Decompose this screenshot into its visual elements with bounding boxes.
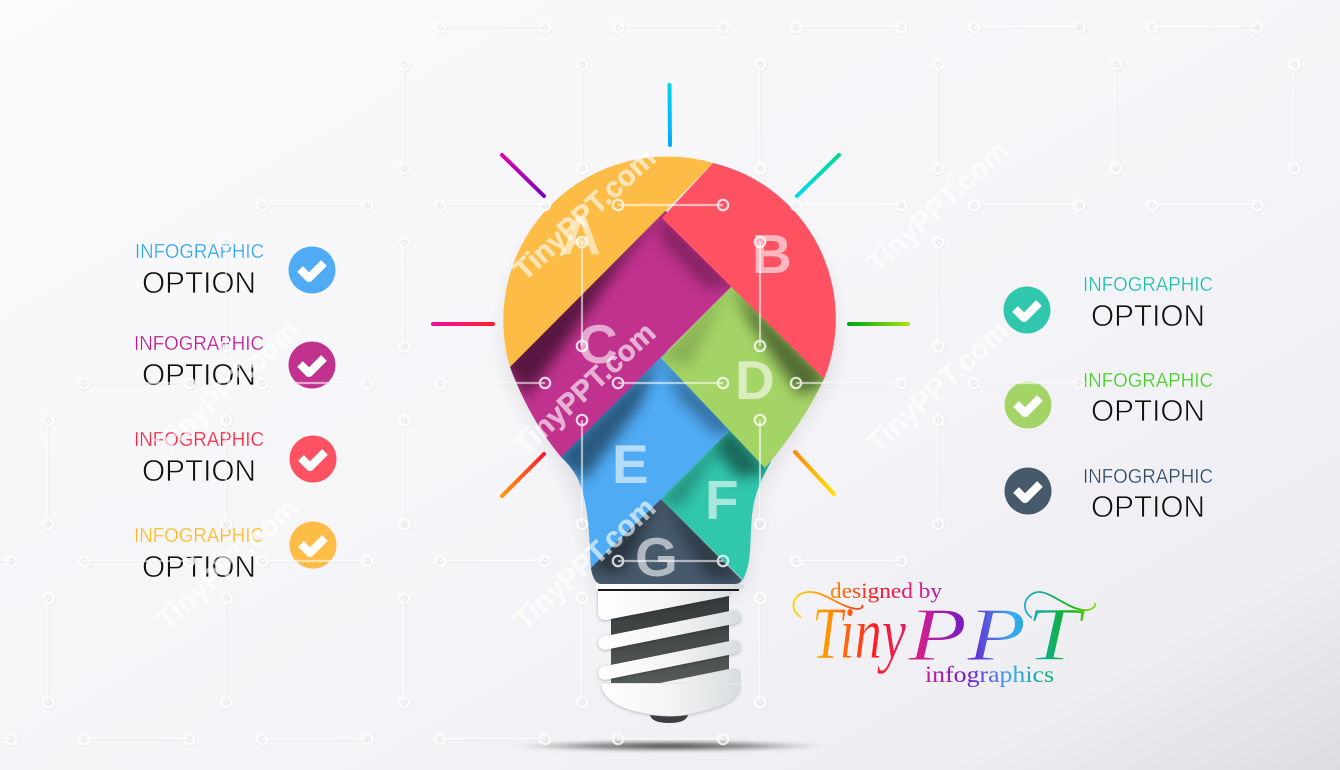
threads xyxy=(605,617,734,673)
logo: designed by TinyPPT infographics: infographics xyxy=(925,662,1054,687)
panel B: red xyxy=(662,163,836,379)
option: teal xyxy=(1004,273,1213,334)
dark screw core xyxy=(611,595,729,683)
panel letters: C xyxy=(578,313,618,375)
panel G: dark slate xyxy=(591,499,742,584)
option: orange: OPTION xyxy=(142,550,256,584)
right options xyxy=(1004,273,1213,524)
watermarks: TinyPPT.com xyxy=(151,492,305,637)
option: slate: INFOGRAPHIC xyxy=(1083,465,1213,488)
panel F: teal xyxy=(661,428,771,580)
left options xyxy=(134,240,336,584)
option: blue: INFOGRAPHIC xyxy=(135,240,264,263)
option: orange: INFOGRAPHIC xyxy=(134,524,264,547)
panel letters: G xyxy=(635,526,678,588)
option: green: OPTION xyxy=(1091,394,1205,428)
panel letters: A xyxy=(561,204,601,266)
panel letters: D xyxy=(735,349,775,411)
panel E: blue xyxy=(561,345,745,570)
panel letters: B xyxy=(752,223,792,285)
panel A: orange xyxy=(503,156,713,367)
option: slate xyxy=(1004,465,1213,524)
option: red xyxy=(134,428,336,488)
panel D: green xyxy=(661,282,826,468)
option: green: INFOGRAPHIC xyxy=(1083,369,1213,392)
watermarks: TinyPPT.com xyxy=(861,315,1015,460)
logo: designed by TinyPPT infographics: Tiny xyxy=(812,593,906,675)
contact tip xyxy=(650,715,688,723)
base cap xyxy=(660,668,741,683)
collar xyxy=(596,584,744,589)
panel C: magenta xyxy=(510,205,735,457)
bulb soft shadow xyxy=(503,169,837,594)
logo: designed by TinyPPT infographics xyxy=(793,578,1095,687)
option: blue xyxy=(135,240,336,300)
ground shadow xyxy=(509,740,829,752)
panel letters xyxy=(561,204,792,588)
option: red: INFOGRAPHIC xyxy=(134,428,264,451)
watermarks xyxy=(151,135,1015,637)
panel letters: E xyxy=(612,433,649,495)
option: green xyxy=(1004,369,1213,428)
option: magenta: INFOGRAPHIC xyxy=(134,332,264,355)
watermarks: TinyPPT.com xyxy=(151,315,305,460)
screw base xyxy=(596,584,744,723)
logo: designed by TinyPPT infographics: PPT xyxy=(907,593,1086,677)
option: red: OPTION xyxy=(142,454,256,488)
option: blue: OPTION xyxy=(142,266,256,300)
watermarks: TinyPPT.com xyxy=(508,142,662,287)
panel letters: F xyxy=(705,469,739,531)
watermarks: TinyPPT.com xyxy=(508,317,662,462)
option: teal: OPTION xyxy=(1091,299,1205,333)
light bulb xyxy=(500,156,837,723)
light rays xyxy=(433,85,908,496)
option: magenta xyxy=(134,332,336,392)
option: magenta: OPTION xyxy=(142,358,256,392)
logo: designed by TinyPPT infographics: designed by xyxy=(830,578,943,603)
option: slate: OPTION xyxy=(1091,490,1205,524)
option: orange xyxy=(134,522,336,584)
upper band xyxy=(598,590,729,620)
option: teal: INFOGRAPHIC xyxy=(1083,273,1213,296)
watermarks: TinyPPT.com xyxy=(861,135,1015,280)
watermarks: TinyPPT.com xyxy=(508,492,662,637)
